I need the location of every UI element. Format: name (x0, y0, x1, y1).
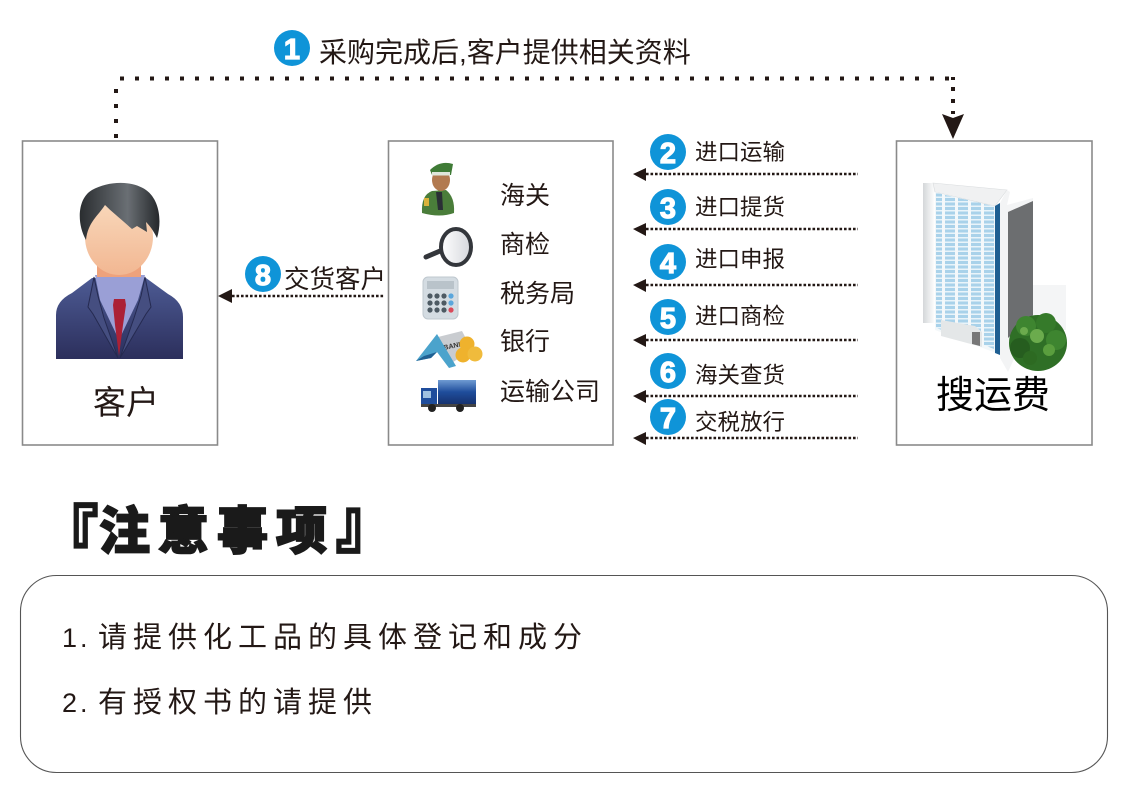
agency labels: 税务局 (500, 280, 575, 308)
panel: agencies (388, 141, 613, 445)
step 8: handover arrow (218, 256, 386, 303)
icon: customs officer (422, 163, 454, 216)
step 4 (633, 244, 858, 292)
heading: notes: 意 (158, 503, 209, 560)
heading: notes: 注 (99, 503, 150, 560)
step 8: handover arrow: 交货客户 (284, 266, 386, 294)
agency labels: 运输公司 (500, 378, 600, 406)
panel: notes (20, 576, 1108, 772)
heading: notes: 事 (217, 503, 268, 560)
step 3: 进口提货 (695, 195, 785, 220)
step 7: 交税放行 (695, 410, 785, 435)
step 4: 进口申报 (695, 247, 785, 272)
panel: customer (22, 141, 218, 445)
agency labels: 海关 (500, 182, 550, 210)
note 1: 1. (62, 623, 91, 653)
step 6: 6 (660, 357, 676, 389)
panel: freight company (896, 141, 1092, 445)
step 1 label: 1 (284, 34, 300, 66)
step 5: 5 (660, 303, 676, 335)
heading: notes: 项 (276, 503, 327, 560)
step 6 (633, 353, 858, 403)
icon: bank card and coins: BANK (443, 341, 464, 352)
note 2: 有授权书的请提供 (98, 686, 378, 719)
icon: truck (421, 380, 476, 412)
agency labels (500, 182, 600, 406)
agency labels: 商检 (500, 231, 550, 259)
icon: customer portrait (56, 183, 183, 359)
step 2 (633, 134, 858, 181)
heading: notes: 』 (336, 488, 394, 561)
agency labels: 银行 (500, 328, 550, 356)
label: customer: 客户 (93, 384, 159, 421)
step 7 (633, 399, 858, 445)
step 3 (633, 189, 858, 236)
step 1 label: 采购完成后,客户提供相关资料 (319, 37, 691, 68)
icon: calculator (423, 277, 458, 319)
step 3: 3 (660, 193, 676, 225)
label: freight company: 搜运费 (936, 375, 1050, 417)
step 7: 7 (660, 403, 676, 435)
step 2: 进口运输 (695, 140, 785, 165)
step 5 (633, 299, 858, 347)
note 1: 请提供化工品的具体登记和成分 (98, 621, 588, 654)
step 5: 进口商检 (695, 304, 785, 329)
heading: notes (40, 488, 394, 575)
step 4: 4 (660, 248, 676, 280)
icon: bank card and coins (416, 331, 482, 368)
step 1: top dotted connector with arrow (116, 77, 964, 139)
bush (1009, 313, 1067, 371)
heading: notes: 『 (40, 502, 98, 575)
step 8: handover arrow: 8 (255, 260, 271, 292)
icon: magnifier (426, 229, 471, 265)
step 2: 2 (660, 138, 676, 170)
step 6: 海关查货 (695, 363, 785, 388)
icon: office building (923, 183, 1067, 372)
note 2: 2. (62, 688, 91, 718)
